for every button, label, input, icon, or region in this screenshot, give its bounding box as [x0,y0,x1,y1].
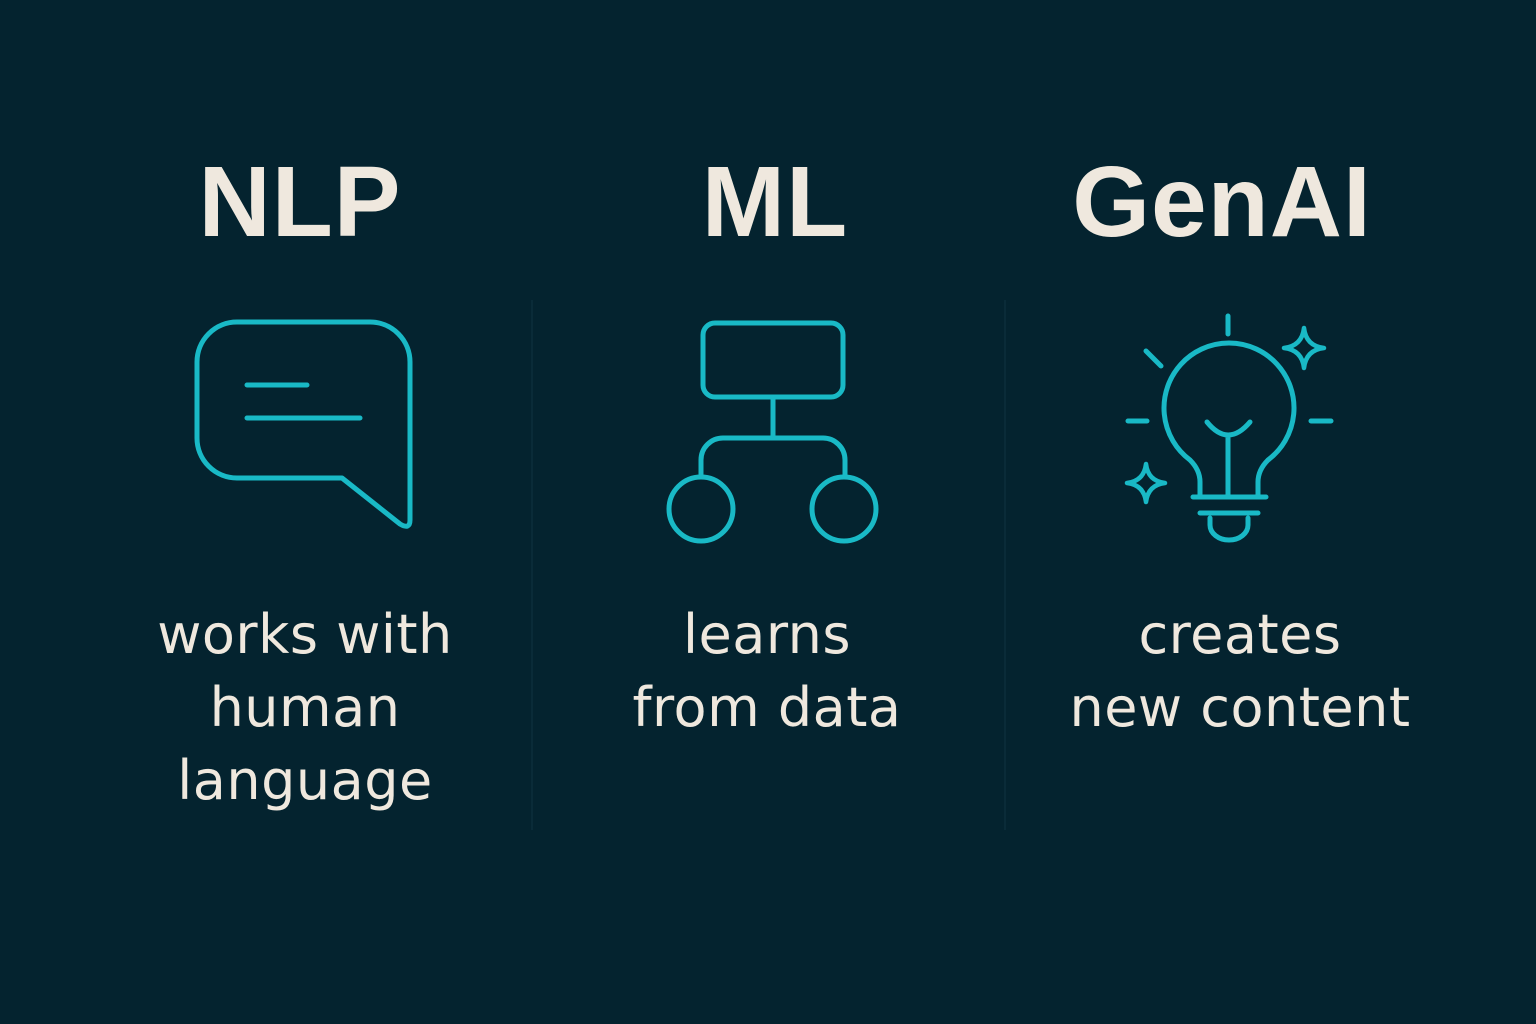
icon: speech bubble [197,322,410,526]
title: GenAI: GenAI [1072,146,1372,258]
text: NLP description: works with [157,603,453,666]
title: NLP: NLP [198,146,402,258]
text: NLP description [157,603,453,812]
text: GenAI description: creates [1138,603,1342,666]
title: ML: ML [702,146,848,258]
icon: tree diagram [669,323,876,541]
text: NLP description: human [210,676,400,739]
text: ML description: learns [683,603,851,666]
text: GenAI description: new content [1069,676,1411,739]
icon: lightbulb [1127,316,1331,540]
text: GenAI description [1069,603,1411,739]
text: NLP description: language [177,749,433,812]
text: ML description [633,603,901,739]
text: ML description: from data [633,676,901,739]
